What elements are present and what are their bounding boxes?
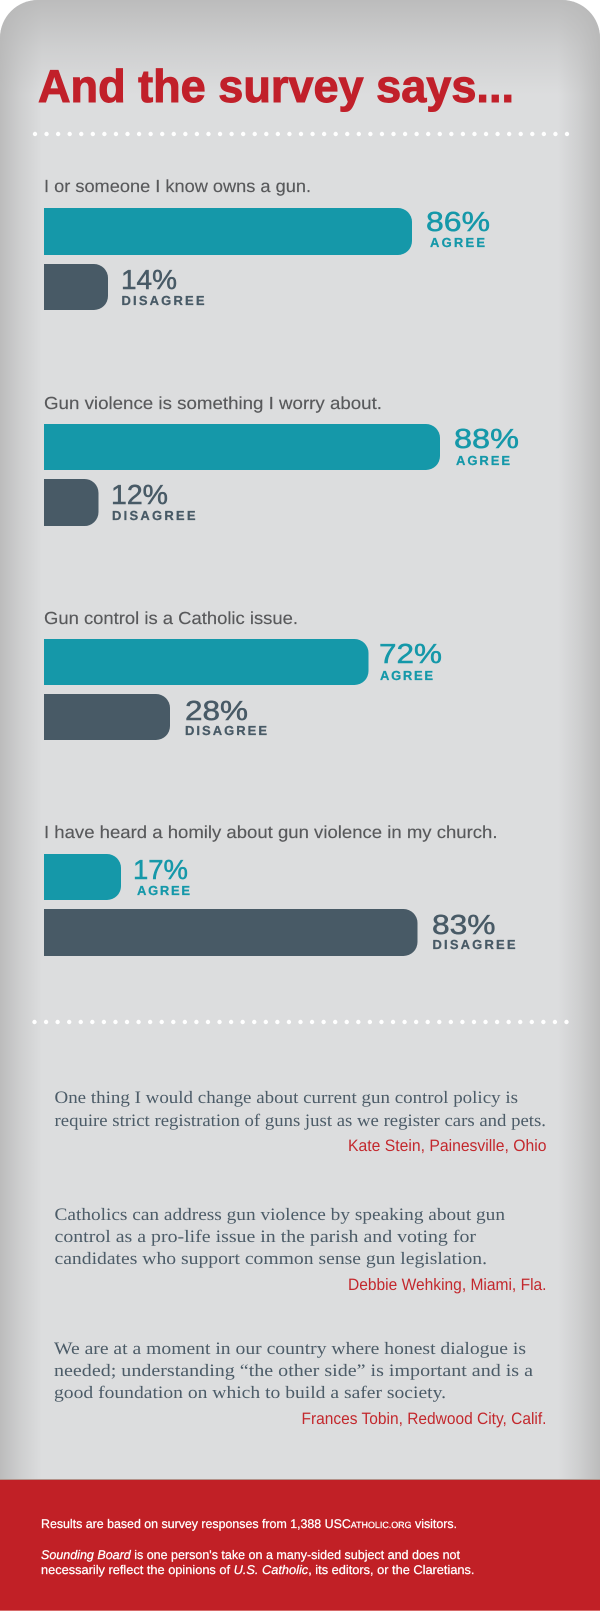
quote text: We are at a moment in our country where honest dialogue is (54, 1338, 526, 1358)
agree label: AGREE (137, 883, 190, 898)
quote text (54, 1338, 533, 1402)
agree value: 17% (133, 854, 188, 885)
quote text (54, 1204, 505, 1268)
attribution: Debbie Wehking, Miami, Fla. (348, 1276, 546, 1294)
title: And the survey says... (38, 60, 514, 112)
disagree label: DISAGREE (185, 723, 267, 738)
agree bar 17% (44, 854, 121, 900)
quote text: require strict registration of guns just as we register cars and pets. (54, 1110, 546, 1130)
quote text: Catholics can address gun violence by speaking about gun (54, 1204, 505, 1224)
disagree value: 12% (111, 479, 168, 510)
agree value: 86% (426, 206, 490, 237)
disclaimer: necessarily reflect the opinions of U.S. Catholic, its editors, or the Claretians. (41, 1563, 474, 1577)
disagree bar 12% (44, 479, 99, 526)
quote text (54, 1087, 546, 1130)
question text: I or someone I know owns a gun. (44, 176, 311, 196)
agree bar 72% (44, 639, 368, 685)
agree value: 88% (454, 423, 519, 454)
disagree label: DISAGREE (112, 508, 196, 523)
disagree value: 14% (121, 264, 177, 295)
agree label: AGREE (430, 235, 485, 250)
question text: I have heard a homily about gun violence in my church. (44, 822, 498, 842)
quote: Frances Tobin (54, 1338, 546, 1428)
quote text: needed; understanding “the other side” is important and is a (54, 1360, 533, 1380)
panel: question 1 (44, 176, 490, 310)
question text: Gun violence is something I worry about. (44, 393, 382, 413)
disclaimer (41, 1548, 474, 1577)
agree value: 72% (379, 638, 442, 669)
agree label: AGREE (456, 453, 510, 468)
disclaimer: Sounding Board is one person's take on a many-sided subject and does not (41, 1548, 461, 1562)
attribution: Frances Tobin, Redwood City, Calif. (302, 1410, 546, 1428)
quote text: control as a pro-life issue in the parish and voting for (54, 1226, 476, 1246)
quote text: One thing I would change about current gun control policy is (54, 1087, 518, 1107)
disagree bar 14% (44, 264, 108, 310)
disagree label: DISAGREE (122, 293, 205, 308)
question text: Gun control is a Catholic issue. (44, 608, 298, 628)
disagree label: DISAGREE (432, 937, 516, 952)
quote text: good foundation on which to build a safer society. (54, 1382, 446, 1402)
survey note: Results are based on survey responses from 1,388 USCATHOLIC.ORG visitors. (41, 1517, 457, 1531)
disagree bar 28% (44, 694, 170, 740)
disagree value: 83% (432, 909, 496, 940)
agree bar 88% (44, 424, 440, 470)
panel: question 4 (44, 822, 516, 956)
disagree value: 28% (185, 695, 248, 726)
panel: question 3 (44, 608, 442, 740)
attribution: Kate Stein, Painesville, Ohio (348, 1137, 546, 1155)
agree label: AGREE (380, 668, 433, 683)
quote text: candidates who support common sense gun legislation. (54, 1248, 487, 1268)
panel: question 2 (44, 393, 519, 526)
footer panel (0, 1479, 600, 1611)
quote: Kate Stein (54, 1087, 546, 1155)
quote: Debbie Wehking (54, 1204, 546, 1294)
agree bar 86% (44, 208, 412, 255)
disagree bar 83% (44, 909, 418, 956)
